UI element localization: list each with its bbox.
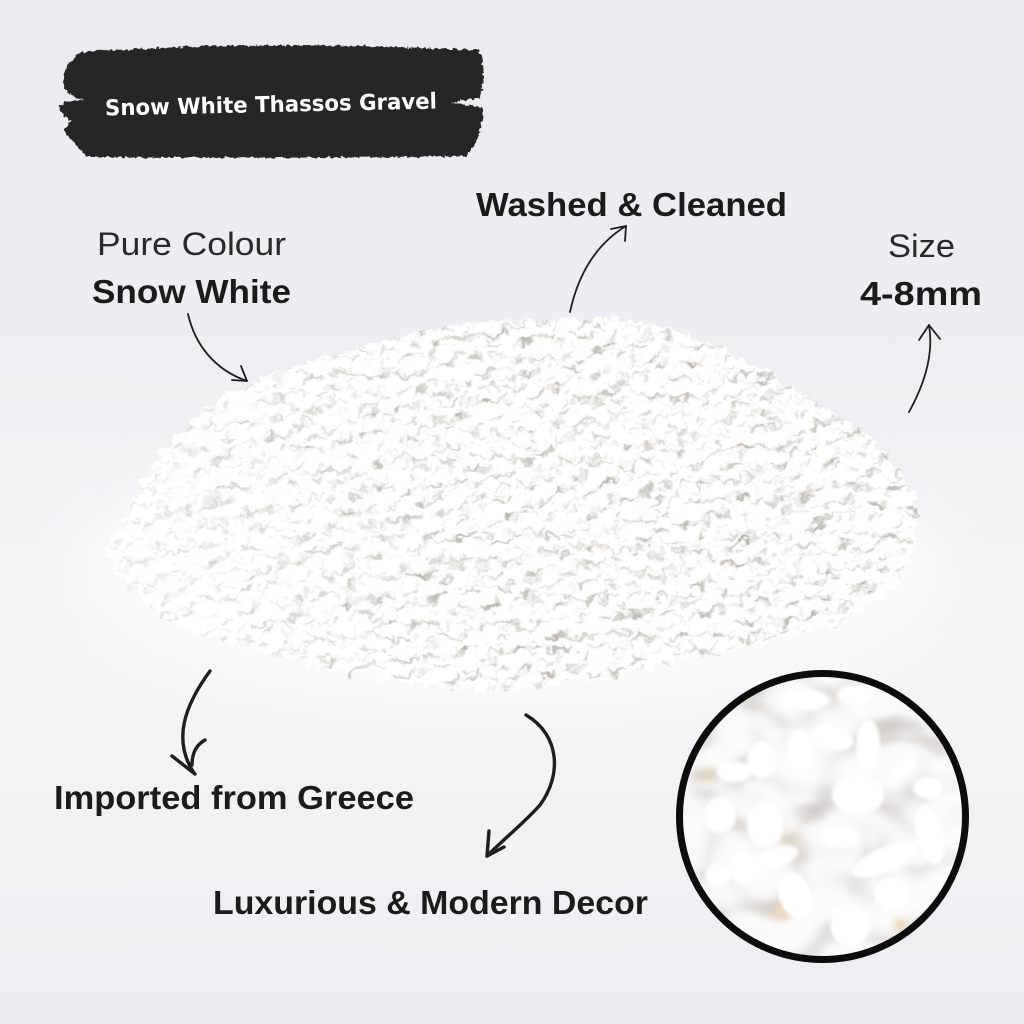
title banner [60,46,484,158]
label: pure colour: Pure Colour [97,226,286,262]
banner title text: Snow White Thassos Gravel [105,90,437,121]
label: size: 4-8mm [860,275,982,312]
arrow: pile to washed and cleaned [570,226,626,312]
arrow: pile to imported from greece [172,671,210,774]
label: size [860,228,982,312]
gravel pile [105,316,921,692]
brush stroke [60,46,484,158]
arrow: pile to size [909,325,940,412]
label: luxurious and modern decor: Luxurious & Modern Decor [213,884,648,921]
label: pure colour: Snow White [92,273,291,310]
label: pure colour [92,226,291,310]
label: imported from greece: Imported from Greece [54,779,414,816]
zoomed gravel circle [676,670,970,964]
arrow: pile to decor [487,715,554,856]
label: washed and cleaned: Washed & Cleaned [476,186,787,223]
arrow: pure colour to pile [188,314,247,381]
label: size: Size [888,228,955,264]
